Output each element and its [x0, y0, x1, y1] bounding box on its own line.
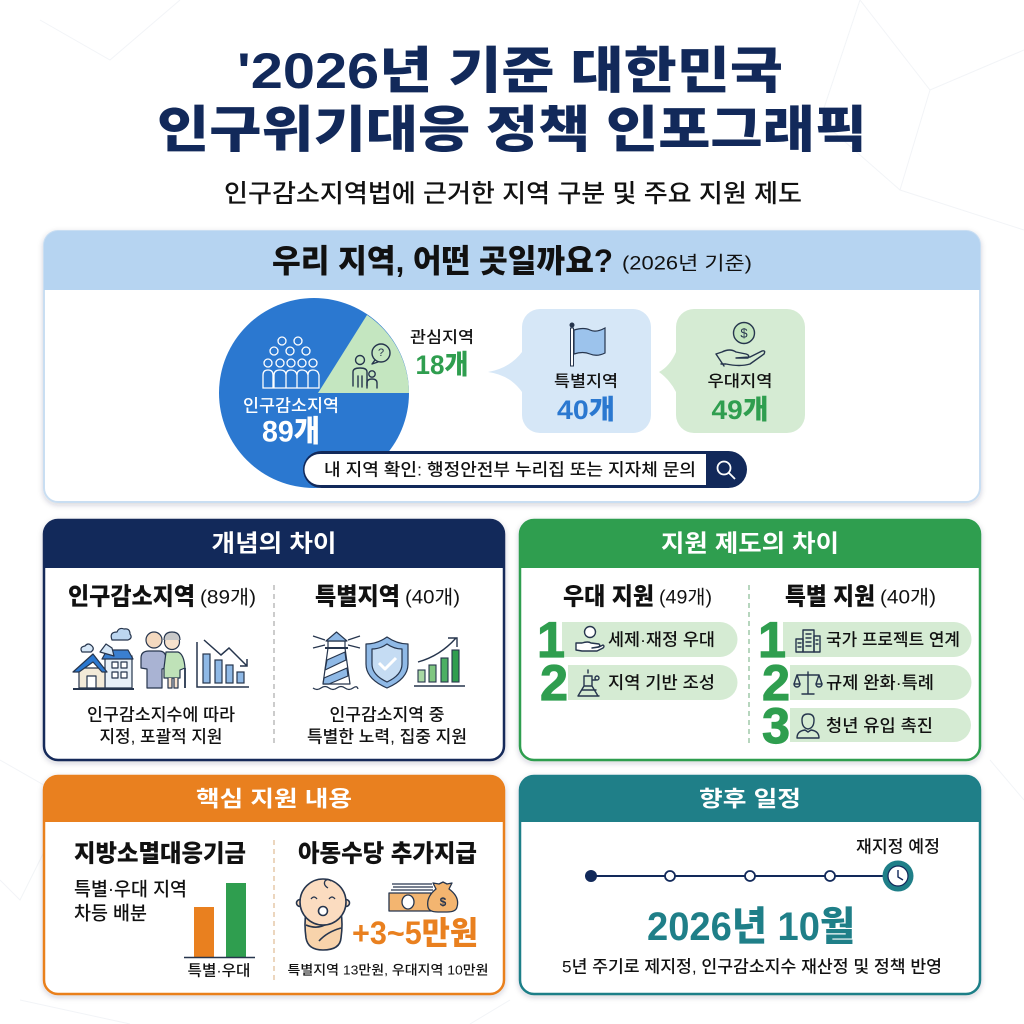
icon: elderly couple [141, 632, 185, 688]
icon: declining bar chart [197, 640, 249, 687]
heading: preferential support: 우대 지원 [563, 584, 654, 610]
heading: special region: 특별지역 [315, 584, 400, 610]
icon: cash and money bag: $ [440, 895, 447, 909]
pie chart [219, 298, 409, 488]
text: population decline description: 인구감소지수에 따라 [87, 706, 235, 724]
panel header: upcoming schedule [520, 776, 980, 822]
item: national project [758, 612, 972, 668]
heading: special support: 특별 지원 [785, 584, 875, 610]
panel header: key support [44, 776, 504, 822]
icon: flag [570, 322, 605, 366]
item: national project: 1 [758, 612, 786, 668]
heading: preferential support [563, 584, 712, 610]
icon: adult and child with question [353, 344, 390, 388]
text: special region description: 특별한 노력, 집중 지원 [307, 728, 467, 746]
title [157, 43, 867, 158]
item: regional infrastructure [540, 655, 738, 711]
panel: concept difference [44, 520, 504, 760]
item: tax and fiscal: 세제·재정 우대 [608, 630, 715, 650]
heading: child allowance: 아동수당 추가지급 [298, 840, 477, 868]
bar chart [184, 883, 255, 980]
icon: adult and child with question: ? [378, 347, 384, 359]
item: regional infrastructure: 지역 기반 조성 [608, 674, 715, 692]
text: population decline description: 지정, 포괄적 지원 [100, 728, 222, 746]
bar chart: 특별·우대 [188, 962, 250, 980]
panel: support system difference [520, 520, 980, 760]
text: fund description: 차등 배분 [74, 902, 147, 924]
label: area of interest [410, 328, 474, 380]
date: October 2026: 2026년 10월 [647, 905, 855, 949]
panel header: key support: 핵심 지원 내용 [196, 786, 352, 812]
item: regulation relief: 규제 완화·특례 [826, 674, 934, 692]
heading: special region: (40개) [405, 586, 460, 608]
icon: growth chart [414, 638, 465, 686]
icon: coin hand [576, 626, 604, 651]
callout: special region: 특별지역 [554, 372, 618, 390]
item: youth inflow: 청년 유입 촉진 [826, 716, 933, 736]
icon: houses [73, 628, 134, 689]
search bar: 내 지역 확인: 행정안전부 누리집 또는 지자체 문의 [324, 460, 696, 480]
amount: additional allowance: +3~5만원 [352, 915, 478, 951]
heading: special region [315, 584, 460, 610]
timeline [585, 860, 914, 892]
callout: preferential region: 49개 [712, 395, 768, 425]
title: '2026년 기준 대한민국 [237, 43, 783, 99]
icon: crowd [263, 337, 319, 388]
panel header: concept difference: 개념의 차이 [212, 530, 336, 558]
item: tax and fiscal [537, 612, 738, 668]
item: youth inflow: 3 [762, 698, 790, 754]
icon: shield with check [366, 637, 408, 688]
text: fund description: 특별·우대 지역 [74, 878, 187, 900]
heading: special support [785, 584, 936, 610]
label: area of interest: 18개 [416, 350, 468, 380]
pie chart: 89개 [262, 416, 320, 448]
icon: infrastructure [578, 670, 599, 696]
icon: hand with coin [716, 322, 765, 366]
heading: population decline region: (89개) [200, 586, 256, 608]
icon: clock [882, 860, 914, 892]
search bar [303, 451, 747, 488]
panel header: region overview: 우리 지역, 어떤 곳일까요? [272, 243, 613, 279]
icon: young person [797, 714, 819, 738]
panel header: support system difference [520, 520, 980, 568]
callout: special region [488, 309, 651, 433]
icon: lighthouse [313, 632, 360, 690]
item: tax and fiscal: 1 [537, 612, 565, 668]
title: 인구위기대응 정책 인포그래픽 [157, 102, 867, 158]
heading: preferential support: (49개) [659, 586, 712, 608]
icon: buildings [796, 630, 820, 652]
text: population decline description [87, 706, 235, 746]
heading: special support: (40개) [880, 586, 936, 608]
panel header: region overview: (2026년 기준) [622, 252, 752, 274]
item: regulation relief [762, 655, 972, 711]
panel header: support system difference: 지원 제도의 차이 [661, 530, 839, 558]
item: national project: 국가 프로젝트 연계 [826, 630, 960, 650]
text: schedule description: 5년 주기로 제지정, 인구감소지수 재산정 및 정책 반영 [562, 958, 942, 976]
subtitle: 인구감소지역법에 근거한 지역 구분 및 주요 지원 제도 [224, 180, 802, 208]
heading: regional fund: 지방소멸대응기금 [74, 840, 246, 868]
icon: cash and money bag [389, 882, 458, 912]
callout: preferential region: 우대지역 [708, 372, 772, 390]
panel: upcoming schedule [520, 776, 980, 994]
callout: special region: 40개 [557, 395, 615, 425]
item: youth inflow [762, 698, 971, 754]
panel header: region overview [44, 231, 980, 290]
pie chart: 인구감소지역 [243, 396, 339, 416]
text: special region description [307, 706, 467, 746]
panel header: upcoming schedule: 향후 일정 [699, 786, 801, 812]
icon: magnifier [718, 462, 735, 479]
item: regulation relief: 2 [762, 655, 790, 711]
item: regional infrastructure: 2 [540, 655, 568, 711]
icon: scales [794, 672, 822, 694]
text: special region description: 인구감소지역 중 [330, 706, 444, 724]
icon: swaddled baby [296, 879, 350, 950]
label: redesignation planned: 재지정 예정 [856, 838, 940, 856]
panel: region overview [44, 231, 980, 502]
callout: preferential region [659, 309, 805, 433]
panel: key support [44, 776, 504, 994]
heading: population decline region: 인구감소지역 [68, 584, 195, 610]
panel header: concept difference [44, 520, 504, 568]
text: fund description [74, 878, 187, 924]
text: allowance detail: 특별지역 13만원, 우대지역 10만원 [288, 962, 488, 978]
icon: hand with coin: $ [740, 326, 748, 340]
label: area of interest: 관심지역 [410, 328, 474, 346]
